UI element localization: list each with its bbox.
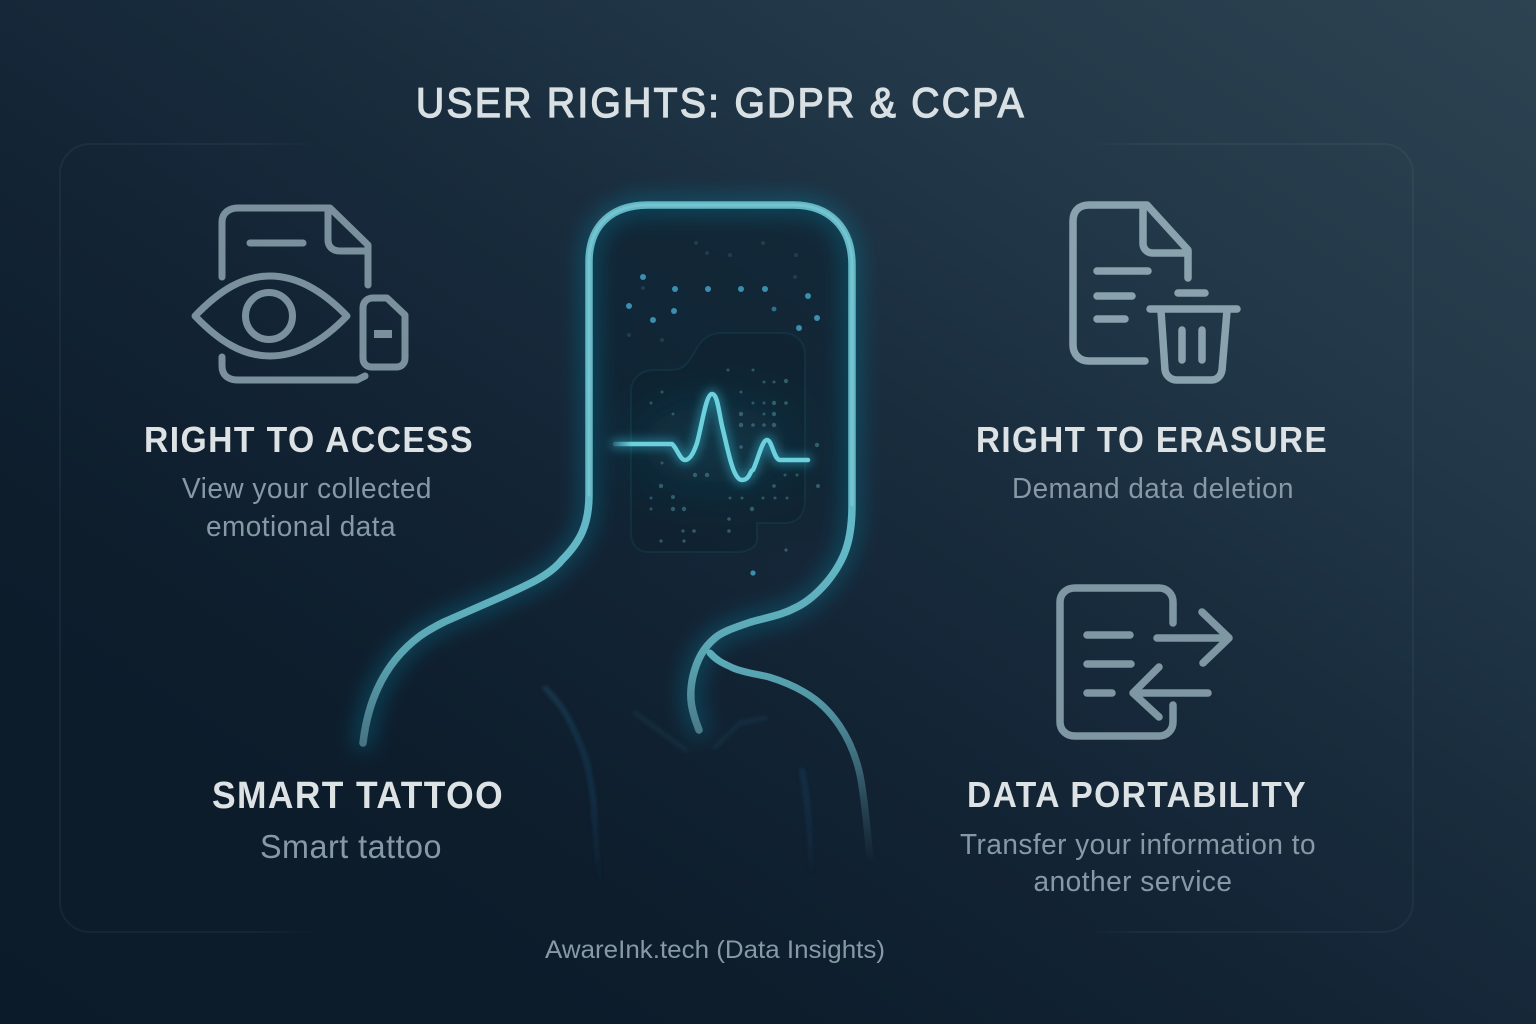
heartbeat line (615, 394, 808, 480)
heading: smart tattoo: SMART TATTOO (212, 775, 504, 817)
description: data portability line 1: Transfer your information to (960, 829, 1316, 861)
heading: data portability: DATA PORTABILITY (967, 774, 1307, 815)
head interior shade (580, 205, 852, 570)
icon: document with eye (195, 208, 405, 380)
description: right to access line 2: emotional data (206, 511, 396, 543)
heading: right to erasure: RIGHT TO ERASURE (976, 419, 1328, 460)
inner chip panel (631, 333, 805, 552)
data dots (626, 274, 820, 576)
description: right to erasure: Demand data deletion (1012, 473, 1294, 505)
icon: document with trash (1073, 205, 1237, 380)
head and shoulder line (363, 205, 852, 743)
heading: right to access: RIGHT TO ACCESS (144, 419, 474, 460)
source credit: AwareInk.tech (Data Insights) (545, 936, 885, 964)
outer panel (60, 144, 1413, 932)
icon: document with arrows (1060, 588, 1229, 736)
faint dot matrix (650, 368, 820, 552)
right shoulder line (710, 653, 870, 857)
dim upper dots (627, 241, 798, 342)
faint torso lines (545, 688, 811, 877)
title: USER RIGHTS: GDPR & CCPA (416, 79, 1026, 126)
description: right to access line 1: View your collected (182, 473, 432, 505)
description: data portability line 2: another service (1034, 866, 1232, 898)
inner glow behind heartbeat (635, 407, 795, 483)
person outline illustration (363, 205, 870, 877)
glow halo (363, 205, 852, 743)
head highlight (589, 205, 852, 505)
faint collar (635, 713, 765, 750)
description: smart tattoo: Smart tattoo (260, 828, 442, 865)
